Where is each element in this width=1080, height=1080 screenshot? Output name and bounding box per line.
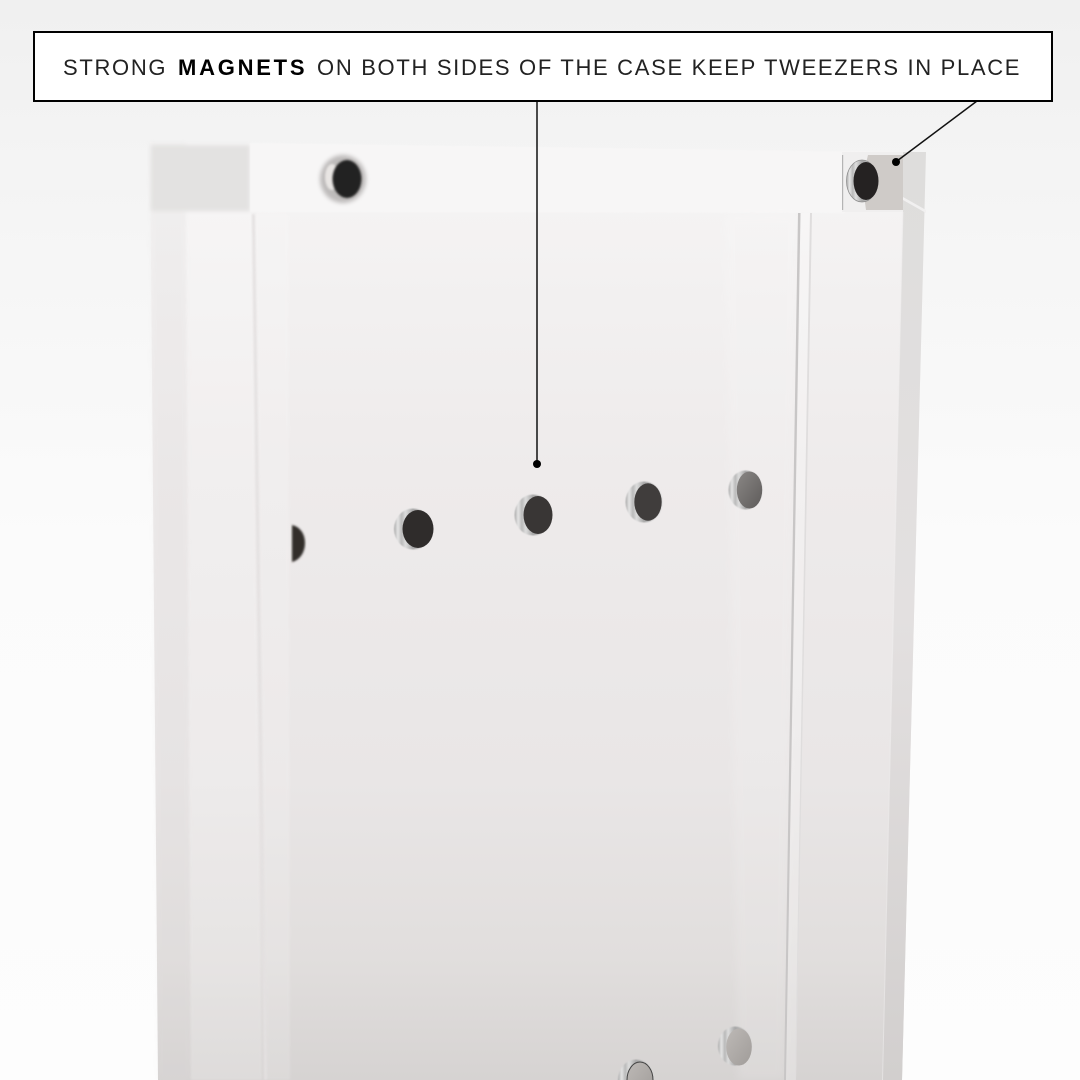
magnet: bottom left [618,1060,654,1080]
corner window [842,152,903,212]
magnet: top right corner [846,160,878,202]
caption box: STRONG MAGNETS ON BOTH SIDES OF THE CASE KEEP TWEEZERS IN PLACE [63,55,1021,80]
caption box [33,31,1053,102]
right outer edge line [882,212,904,1080]
right frame edge lines [784,213,800,1080]
inner panel left edge [252,214,267,1080]
top-left corner shading [151,145,250,211]
magnet 1: cut off at panel edge [292,525,305,562]
leader line: centre magnet [533,102,541,468]
magnet: top left [320,155,366,203]
inner panel left soft band [255,214,290,1080]
magnet 2 [394,508,434,550]
left outer strip [150,142,191,1080]
leader line: corner magnet [892,101,977,166]
magnet row [292,470,762,562]
magnet 3 [514,494,552,536]
acrylic block body [150,142,926,1080]
magnet 5 [728,470,762,510]
top rail [250,143,845,213]
right edge of block [882,152,926,1080]
left inner band [186,212,262,1080]
inner panel right soft band [725,213,798,1080]
magnet 4 [626,482,662,522]
magnet: bottom right [718,1026,752,1066]
